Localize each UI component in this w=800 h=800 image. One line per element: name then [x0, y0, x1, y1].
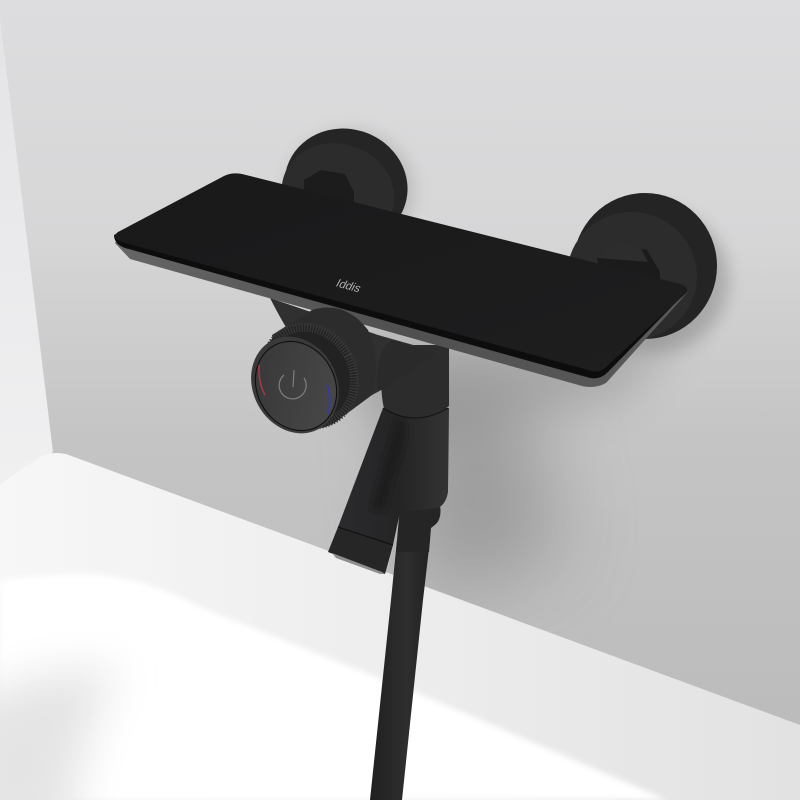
mixer column: [381, 345, 449, 418]
wall shadows cast by the mixer: [286, 130, 729, 600]
basin shadow, lower left: [0, 670, 120, 800]
bathtub rim: [0, 453, 800, 800]
spout body: [338, 408, 449, 545]
knob face: [240, 327, 352, 445]
shelf edge: [114, 232, 688, 378]
glass shelf: [114, 173, 688, 378]
hose: [370, 540, 430, 800]
hose connector: [396, 505, 440, 552]
cold indicator: [327, 385, 330, 414]
column collar line: [383, 408, 448, 418]
hex nut: [304, 170, 354, 215]
spout outlet: [328, 527, 393, 574]
knob body: [272, 308, 376, 425]
left wall rosette: [268, 113, 423, 259]
hot indicator: [259, 365, 265, 395]
knurled ring: [242, 308, 374, 446]
hub highlight: [377, 340, 437, 390]
bathtub basin: [0, 575, 667, 800]
shelf underside: [115, 236, 688, 387]
brand logo: Iddis: [334, 277, 364, 295]
control knob: [234, 308, 376, 449]
knob face rim: [234, 321, 356, 449]
right wall rosette: [550, 193, 717, 357]
hex nut: [597, 242, 660, 290]
shelf top surface: [115, 173, 687, 372]
shelf bracket hub: [270, 298, 438, 395]
left side wall: [0, 18, 53, 484]
power icon: [279, 370, 306, 399]
spout crease: [372, 418, 406, 510]
